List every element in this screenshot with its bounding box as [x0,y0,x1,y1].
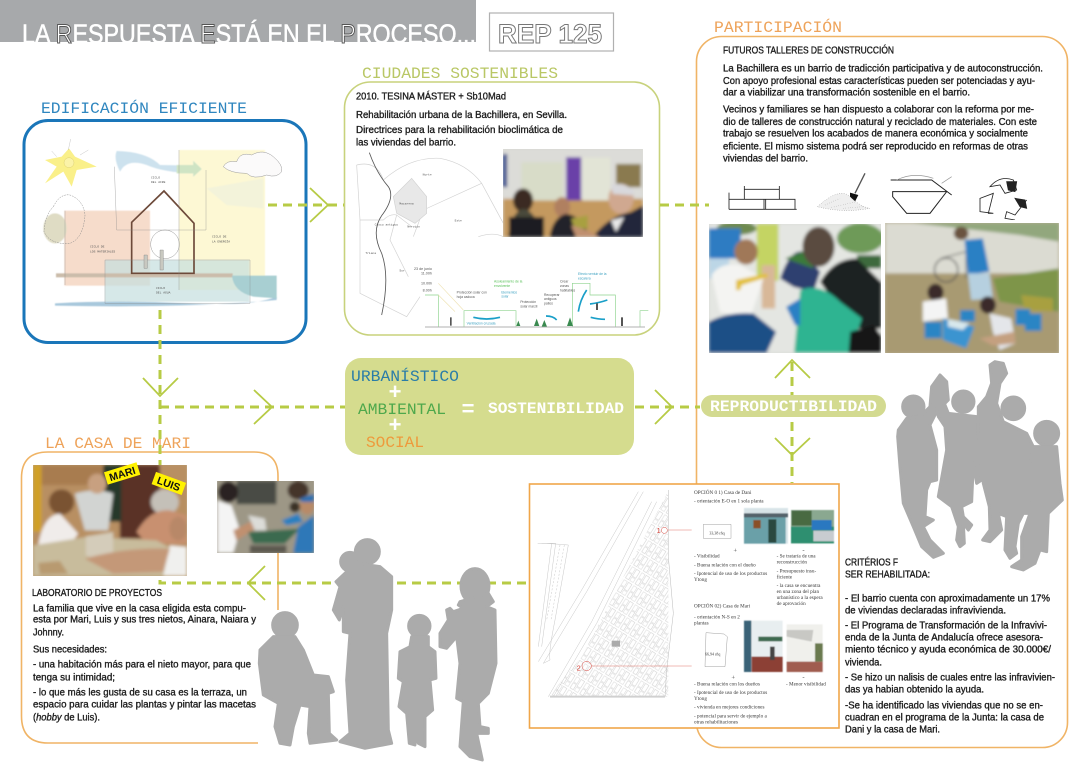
icon: shovel and gravel [817,173,870,210]
panel: sostenibilidad equation: + [389,412,401,437]
map and bioclimatic section: solar [501,295,509,299]
text: laboratorio de proyectos: - una habitación más para el nieto mayor, para que [33,660,252,670]
option 1: casa de Dani: - [802,548,805,555]
photo: taller niños y voluntarios [709,224,881,353]
heading: la casa de mari: LA CASA DE MARI [45,435,191,453]
text: criterios para ser rehabilitada: CRITÉRIOS F [845,558,898,568]
option 2: casa de Mari: - vivienda en mejores condiciones [694,705,764,711]
sketch: ciclos de edificación eficiente: DEL AGUA [156,292,171,295]
panel: sostenibilidad equation: = [462,396,474,421]
heading: edificación eficiente: EDIFICACIÓN EFICIENTE [41,99,247,118]
icon: tree outline [44,195,85,244]
map and bioclimatic section: patios [544,301,553,305]
option 1: casa de Dani [694,488,834,607]
icon: skip [891,175,952,213]
heading: participación: PARTICIPACIÓN [714,18,842,37]
option 1: casa de Dani: + [733,548,737,555]
map and bioclimatic section: 8.00h [423,289,432,293]
label: MARI [104,462,140,485]
map and bioclimatic section: Este [455,219,462,222]
icons: talleres sketches [728,173,1028,220]
option 2: casa de Mari: + [731,674,735,681]
option 2: casa de Mari: - potencial para servir de ejemplo a [694,713,767,719]
option 1: casa de Dani: de aprovación [777,601,806,607]
map and bioclimatic section: 10.00h [421,282,432,286]
map and bioclimatic section: 11.00h [421,271,432,275]
arrow: to reproductibilidad [655,390,672,424]
text: laboratorio de proyectos: Sus necesidades: [33,644,107,656]
dashed connector: to centre box [160,406,345,408]
panel: ciudades sostenibles outline [344,82,660,335]
map and bioclimatic section: Sur [399,269,405,272]
girl [398,615,436,747]
silhouettes: group with raised hands [898,362,1062,570]
option 2: casa de Mari: - Ipotencial de uso de los productos [694,690,767,696]
photo: reunión tesina [503,149,643,237]
text: ciudades sostenibles: las viviendas del barrio. [356,138,456,148]
panel: sostenibilidad equation: SOSTENIBILIDAD [488,400,624,418]
option 1: casa de Dani: ficiente [777,573,793,580]
issue badge [490,13,614,51]
text: criterios para ser rehabilitada: Dani y la casa de Mari. [845,724,940,736]
panel: plano y opciones [530,484,839,728]
text: criterios para ser rehabilitada: - Se hizo un nalisis de cuales entre las infravivien- [845,672,1055,684]
arrow: down to casa de mari [143,378,178,396]
text: futuros talleres: dio de talleres de construcción natural y reciclado de materiales. Con este [723,117,1038,128]
text: criterios para ser rehabilitada: vivienda. [845,658,882,668]
text: futuros talleres: trabajo se resuelven los acabados de manera económica y socialmente [723,128,1029,140]
map and bioclimatic section: zonas [560,284,569,288]
text: criterios para ser rehabilitada: de viviendas declaradas infravivienda. [845,606,1006,616]
map and bioclimatic section: hoja caduca [457,295,475,299]
option 2: casa de Mari: otras rehabilitaciones [694,719,738,725]
icon: recycling arrows [980,178,1027,220]
option 1: casa de Dani: - orientación E-O en 1 sola planta [694,499,764,505]
panel: la casa de mari outline [22,452,278,743]
option 1: casa de Dani: reconstrucción [777,560,807,566]
text: laboratorio de proyectos: esta por Mari, Luis y sus tres nietos, Ainara, Naiara y [33,614,256,626]
dashed connector: centre box to reproductibilidad [635,406,700,408]
sketch: ciclos de edificación eficiente [42,139,282,307]
map and bioclimatic section: Elementos [501,290,517,294]
title: LA RESPUESTA ESTÁ EN EL PROCESO... [22,19,476,49]
map and bioclimatic section: solar marzil [520,304,538,308]
text: criterios para ser rehabilitada: das ya habian obtenido la ayuda. [845,684,984,696]
text: laboratorio de proyectos: tenga su intimidad; [33,672,115,684]
text: futuros talleres [723,46,1043,164]
option 1: casa de Dani: OPCIÓN 0 1) Casa de Dani [694,488,752,496]
text: ciudades sostenibles [356,92,567,148]
option 1: casa de Dani: - la casa se encuentra [777,583,821,589]
map and bioclimatic section: Recuperar [544,293,560,297]
panel: sostenibilidad equation: + [389,379,401,404]
photo: taller en la mesa [217,481,314,553]
map and bioclimatic section: Asoleamiento de la [494,280,522,284]
heading: ciudades sostenibles: CIUDADES SOSTENIBLES [362,65,558,83]
panel: sostenibilidad equation: AMBIENTAL [358,401,446,419]
map and bioclimatic section: Efecto ventuir de la [578,272,607,276]
text: ciudades sostenibles: 2010. TESINA MÁSTER + Sb10Mad [356,92,506,102]
plan of the neighbourhood: 2 [577,663,581,672]
map and bioclimatic section: escalera [578,276,591,280]
dashed connector: edificación down to casa de mari [160,310,530,583]
map and bioclimatic section: Protección [520,300,536,304]
option 1: casa de Dani: urbanístico a la espera [777,595,823,601]
label: MARI: MARI [108,465,137,484]
text: criterios para ser rehabilitada [845,558,1055,736]
text: criterios para ser rehabilitada: - El Programa de Transformación de la Infravivi- [845,620,1047,632]
map and bioclimatic section: Nervión [407,224,420,228]
sketch: ciclos de edificación eficiente: LA ENERGÍA [212,239,230,243]
arrow: up to participación [775,360,810,378]
text: futuros talleres: La Bachillera es un barrio de tradicción participativa y de autoconstrucción. [723,64,1043,74]
panel: sostenibilidad equation: SOCIAL [366,434,424,452]
text: criterios para ser rehabilitada: -Se ha identificado las viviendas que no se en- [845,700,1043,712]
option 1: casa de Dani: Ytong [694,577,707,583]
text: laboratorio de proyectos: (hobby de Luis). [33,712,100,724]
photo: mari y luis [33,462,187,576]
issue badge: REP 125 [498,19,602,49]
option 2: casa de Mari: - Buena relación con los dueños [694,681,760,687]
option 1: casa de Dani: - Presupuesto insu- [777,568,816,574]
text: laboratorio de proyectos: espacio para cuidar las plantas y pintar las macetas [33,700,256,710]
option 2: casa de Mari: - [802,674,805,681]
seated grandfather [259,613,337,745]
map of Seville districts [357,158,503,317]
text: laboratorio de proyectos: La familia que vive en la casa eligida esta compu- [33,604,246,614]
text: futuros talleres: dar a viabilizar una transformación sostenible en el barrio. [723,88,970,98]
option 1: casa de Dani: - Visibilidad [694,554,720,560]
section diagram [425,283,648,327]
map and bioclimatic section: Casco antiguo [375,223,398,227]
option 1: casa de Dani: 33,38 rñq [709,530,725,536]
text: criterios para ser rehabilitada: cuadran en el programa de la Junta: la casa de [845,712,1045,724]
house section [132,191,194,273]
option 2: casa de Mari: - orientación N-S en 2 [694,614,740,620]
arrow: to centre box [254,390,272,424]
man carrying child [333,540,392,748]
panel: sostenibilidad equation [345,358,634,455]
map and bioclimatic section: 23 de junio [414,267,432,271]
woman [440,569,496,760]
text: ciudades sostenibles: Directrices para la rehabilitación bioclimática de [356,125,564,136]
map and bioclimatic section: Norte [423,173,432,176]
text: laboratorio de proyectos: Johnny. [33,628,64,638]
text: laboratorio de proyectos [32,588,256,724]
sketch: ciclos de edificación eficiente: CICLO DE [90,246,105,249]
arrow: to casa de mari [248,566,265,600]
text: criterios para ser rehabilitada: miento técnico y ayuda económica de 30.000€/ [845,644,1051,656]
silhouettes: family [259,540,496,760]
sketch: ciclos de edificación eficiente: CICLO DE [212,236,227,239]
panel: sostenibilidad equation: URBANÍSTICO [351,367,459,386]
map and bioclimatic section: antiguos [544,297,557,301]
option 1: casa de Dani: - Se trataría de una [777,554,816,560]
icon: cloud [223,152,282,177]
text: ciudades sostenibles: Rehabilitación urbana de la Bachillera, en Sevilla. [356,110,567,121]
option 2: casa de Mari [694,602,826,725]
label: LUIS [151,472,186,496]
text: futuros talleres: eficiente. El mismo sistema podrá ser reproducido en reformas de otras [723,142,1028,152]
option 2: casa de Mari: - Menor visibilidad [786,681,826,687]
text: futuros talleres: FUTUROS TALLERES DE CONSTRUCCIÓN [723,46,894,56]
text: futuros talleres: Con apoyo profesional estas características pueden ser potenciadas y ayu- [723,76,1035,87]
icon: bricks [729,186,797,209]
option 2: casa de Mari: 66,94 rñq [705,652,720,658]
plan of the neighbourhood: 1 [657,526,661,535]
text: criterios para ser rehabilitada: enda de la Junta de Andalucía ofrece asesora- [845,632,1043,644]
map and bioclimatic section [356,152,648,328]
photo: taller niñas con cubos [885,223,1059,353]
text: criterios para ser rehabilitada: SER REHABILITADA: [845,570,930,580]
option 2: casa de Mari: plantas [694,620,709,626]
map and bioclimatic section: Macarena [399,202,414,205]
option 2: casa de Mari: Ytong [694,696,707,702]
sketch: ciclos de edificación eficiente: LOS MATERIALES [90,250,115,253]
map and bioclimatic section: Triana [365,251,376,255]
dashed connector: ciudades to participación [660,204,709,206]
arrow: edificación to ciudades [310,188,328,222]
header band [0,0,476,42]
map and bioclimatic section: habitables [560,288,576,292]
sketch: ciclos de edificación eficiente: DEL AIRE [151,181,166,184]
text: criterios para ser rehabilitada: - El barrio cuenta con aproximadamente un 17% [845,594,1050,604]
text: futuros talleres: viviendas del barrio. [723,154,808,164]
panel: edificación eficiente outline [24,120,306,342]
text: laboratorio de proyectos: - lo que más les gusta de su casa es la terraza, un [33,688,247,698]
arrow: down to plan [775,438,810,455]
map and bioclimatic section: Ventilación cruzada [467,321,496,325]
option 2: casa de Mari: OPCIÓN 02) Casa de Mari [694,602,751,610]
sketch: ciclos de edificación eficiente: CICLO [151,176,160,179]
map and bioclimatic section: envolvente [494,284,510,288]
dashed connector: edificación to ciudades [268,204,344,206]
text: futuros talleres: Vecinos y familiares se han dispuesto a colaborar con la reforma por me- [723,104,1034,116]
dashed connector: reproductibilidad vertical [790,362,794,483]
panel: participación outline [696,36,1068,748]
sketch: ciclos de edificación eficiente: CICLO [156,287,165,290]
option 1: casa de Dani: - Buena relación con el dueño [694,562,756,568]
label: LUIS: LUIS [155,475,182,494]
map and bioclimatic section: Crear [560,280,569,284]
icon: sun [45,139,97,187]
pill: reproductibilidad: REPRODUCTIBILIDAD [710,398,877,416]
option 1: casa de Dani: - Ipotencial de uso de los productos [694,571,767,577]
text: laboratorio de proyectos: LABORATORIO DE PROYECTOS [32,588,162,599]
plan of the neighbourhood [538,490,692,700]
map and bioclimatic section: Protección solar con [457,291,487,295]
option 1: casa de Dani: en una zona del plan [777,589,819,595]
